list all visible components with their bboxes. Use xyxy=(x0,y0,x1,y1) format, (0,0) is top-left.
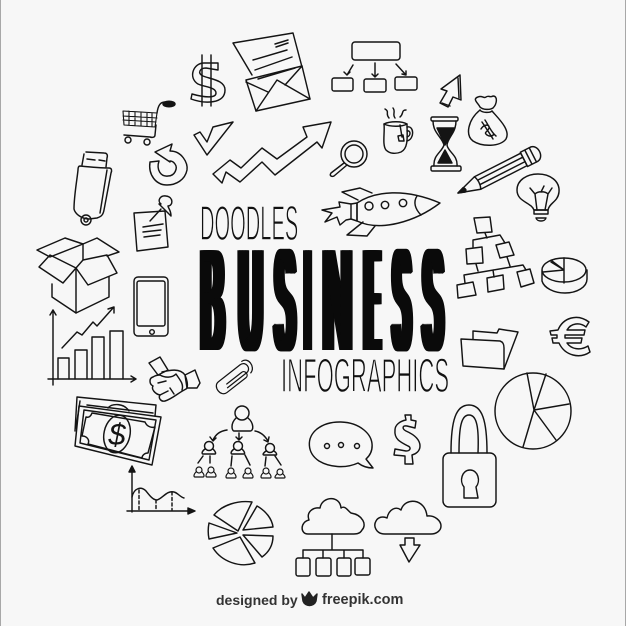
chart: bars with trend line xyxy=(48,307,136,385)
heading: business: E xyxy=(360,219,373,381)
icon: growth arrow xyxy=(213,122,331,183)
icon: USB stick xyxy=(74,152,112,225)
icon: refresh arrow xyxy=(150,144,187,185)
icon: cardboard box xyxy=(37,238,119,313)
heading: business: U xyxy=(235,219,257,381)
icon: dollar outline xyxy=(394,415,420,464)
icon: flowchart xyxy=(332,42,417,92)
heading: doodles: DOODLES xyxy=(200,196,298,250)
icon: padlock xyxy=(443,405,496,507)
icon: hourglass xyxy=(431,117,461,171)
icon: cursor arrow xyxy=(440,75,461,107)
icon: check mark xyxy=(194,122,233,155)
heading: business xyxy=(197,219,446,381)
heading: business: N xyxy=(319,219,347,381)
icon: rocket xyxy=(322,188,440,236)
icon: paperclip xyxy=(213,358,256,396)
chart: exploded pie xyxy=(208,502,273,565)
icon: hierarchy chart xyxy=(457,217,534,298)
icon: 3D pie chart xyxy=(542,258,587,293)
icon: magnifying glass xyxy=(330,141,367,176)
heading: business: S xyxy=(418,219,437,381)
icon: organisation people tree xyxy=(194,406,285,478)
icon: banknotes xyxy=(75,397,161,465)
icon: coffee mug xyxy=(384,108,413,153)
icon: cloud download xyxy=(375,501,441,562)
icon: money bag xyxy=(469,96,507,145)
icon: light bulb xyxy=(517,174,559,221)
icon: cloud network xyxy=(296,499,370,576)
heading: business: S xyxy=(388,219,405,381)
heading: business: B xyxy=(197,219,219,381)
icon: smartphone xyxy=(134,277,168,336)
icon: pencil xyxy=(454,144,543,200)
icon: speech bubble xyxy=(309,422,373,468)
heading: business: I xyxy=(299,219,311,381)
icon: folder xyxy=(461,329,518,369)
icon: handshake xyxy=(149,357,200,401)
icon: pinned note xyxy=(134,196,172,251)
icon: euro sign xyxy=(550,317,590,356)
footer: designed by: designed by xyxy=(216,592,298,608)
heading: business: S xyxy=(270,219,289,381)
icon: banknotes: $ xyxy=(107,417,126,452)
chart: small line chart xyxy=(127,466,195,514)
heading: infographics: INFOGRAPHICS xyxy=(281,350,449,402)
logo: freepik crown xyxy=(302,592,317,606)
icon: shopping cart xyxy=(123,101,175,145)
icon: dollar sign xyxy=(191,55,225,106)
chart: large pie xyxy=(495,373,571,449)
icon: envelope with letter xyxy=(233,33,310,111)
footer: freepik.com: freepik.com xyxy=(322,592,403,608)
